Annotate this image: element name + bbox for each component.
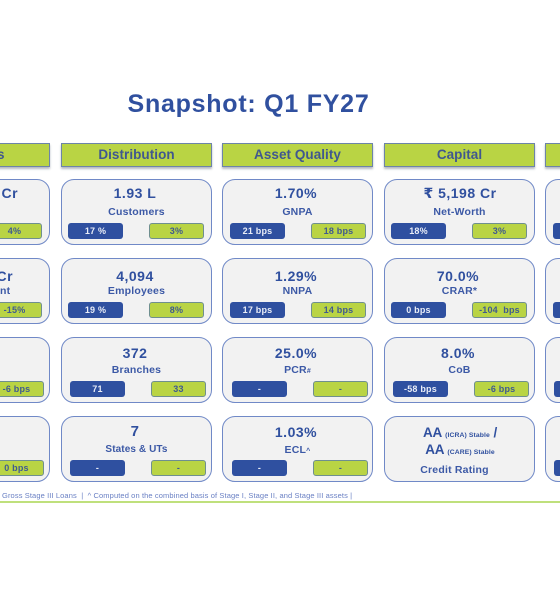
header: capital xyxy=(384,143,535,167)
green badge: - xyxy=(339,384,342,394)
green badge: 4% xyxy=(8,226,21,236)
green badge xyxy=(0,223,42,239)
green badge: 3% xyxy=(170,226,183,236)
green badge xyxy=(149,223,204,239)
panel: states and UTs xyxy=(61,416,212,482)
panel: net-worth xyxy=(384,179,535,245)
green badge: 18 bps xyxy=(324,226,353,236)
blue badge: -58 bps xyxy=(404,384,437,394)
green badge xyxy=(472,302,527,318)
blue badge: 71 xyxy=(92,384,103,394)
panel: first column row 2 (cropped) xyxy=(0,258,50,324)
green badge xyxy=(151,381,206,397)
panel: NNPA xyxy=(222,258,373,324)
green badge xyxy=(472,223,527,239)
blue badge: - xyxy=(258,463,261,473)
panel: last column row 1 (cropped) xyxy=(545,179,560,245)
blue badge xyxy=(70,381,125,397)
panel: employees xyxy=(61,258,212,324)
green badge: -6 bps xyxy=(488,384,515,394)
label: nt xyxy=(0,285,10,297)
blue badge: 17 % xyxy=(85,226,106,236)
header: first column (cropped) xyxy=(0,143,50,167)
blue badge xyxy=(393,381,448,397)
panel: first column row 4 (cropped) xyxy=(0,416,50,482)
label: PCR# xyxy=(284,364,311,376)
blue badge xyxy=(230,223,285,239)
blue badge: 21 bps xyxy=(243,226,272,236)
panel: GNPA xyxy=(222,179,373,245)
label: ECL^ xyxy=(285,444,310,456)
ICRA rating: AA (ICRA) Stable / xyxy=(423,425,497,440)
label: CRAR* xyxy=(442,285,477,297)
footnote: Gross Stage III Loans | ^ Computed on the combined basis of Stage I, Stage II, and Stage III assets | xyxy=(2,491,352,500)
blue badge xyxy=(553,223,560,239)
label: Employees xyxy=(108,285,165,297)
label: Branches xyxy=(112,364,161,376)
label: Net-Worth xyxy=(433,206,486,218)
value: 1.03% xyxy=(275,424,317,440)
panel: cost of borrowing xyxy=(384,337,535,403)
green badge xyxy=(474,381,529,397)
value: 1.93 L xyxy=(114,185,156,201)
panel: last column row 3 (cropped) xyxy=(545,337,560,403)
CARE rating: AA (CARE) Stable xyxy=(425,442,495,457)
blue badge xyxy=(70,460,125,476)
value: ₹ 5,198 Cr xyxy=(423,185,497,201)
green badge xyxy=(313,381,368,397)
green badge: -104 bps xyxy=(479,305,520,315)
blue badge: 0 bps xyxy=(406,305,431,315)
header: asset quality: Asset Quality xyxy=(254,147,341,162)
title: Snapshot: Q1 FY27 xyxy=(128,90,369,118)
blue badge xyxy=(232,460,287,476)
panel: customers xyxy=(61,179,212,245)
blue badge xyxy=(232,381,287,397)
value: 70.0% xyxy=(437,268,479,284)
panel: ECL xyxy=(222,416,373,482)
green badge: -6 bps xyxy=(3,384,30,394)
value: Cr xyxy=(2,185,18,201)
green badge: -15% xyxy=(4,305,25,315)
label: Credit Rating xyxy=(420,464,489,476)
label: NNPA xyxy=(283,285,312,297)
green badge xyxy=(0,381,44,397)
blue badge xyxy=(68,302,123,318)
blue badge: - xyxy=(96,463,99,473)
value: 7 xyxy=(131,423,139,440)
blue badge xyxy=(391,302,446,318)
green badge: 8% xyxy=(170,305,183,315)
green badge: 33 xyxy=(173,384,184,394)
panel: first column row 1 (cropped) xyxy=(0,179,50,245)
value: 372 xyxy=(123,345,147,361)
panel: last column row 2 (cropped) xyxy=(545,258,560,324)
label: CoB xyxy=(448,364,471,376)
value: 25.0% xyxy=(275,345,317,361)
header: last column (cropped) xyxy=(545,143,560,167)
blue badge xyxy=(554,460,560,476)
value: 8.0% xyxy=(441,345,475,361)
blue badge: - xyxy=(258,384,261,394)
blue badge xyxy=(553,302,560,318)
panel: last column row 4 (cropped) xyxy=(545,416,560,482)
value: 1.70% xyxy=(275,185,317,201)
green badge xyxy=(311,302,366,318)
green badge xyxy=(0,460,44,476)
header: asset quality xyxy=(222,143,373,167)
green badge xyxy=(313,460,368,476)
header: distribution xyxy=(61,143,212,167)
green badge xyxy=(151,460,206,476)
value: 1.29% xyxy=(275,268,317,284)
header: distribution: Distribution xyxy=(98,147,175,162)
green badge xyxy=(311,223,366,239)
blue badge xyxy=(68,223,123,239)
panel: credit rating xyxy=(384,416,535,482)
blue badge xyxy=(554,381,560,397)
panel: CRAR xyxy=(384,258,535,324)
green badge: - xyxy=(339,463,342,473)
blue badge: 18% xyxy=(409,226,428,236)
panel: PCR xyxy=(222,337,373,403)
label: States & UTs xyxy=(105,444,168,455)
blue badge: 17 bps xyxy=(243,305,272,315)
blue badge: 19 % xyxy=(85,305,106,315)
green badge: 3% xyxy=(493,226,506,236)
green badge xyxy=(149,302,204,318)
footer rule xyxy=(0,501,560,503)
green badge xyxy=(0,302,42,318)
label: Customers xyxy=(108,206,165,218)
blue badge xyxy=(391,223,446,239)
label: GNPA xyxy=(282,206,313,218)
green badge: 0 bps xyxy=(4,463,29,473)
value: 4,094 xyxy=(116,268,154,284)
green badge: 14 bps xyxy=(324,305,353,315)
header: capital: Capital xyxy=(437,147,482,162)
green badge: - xyxy=(177,463,180,473)
panel: branches xyxy=(61,337,212,403)
blue badge xyxy=(230,302,285,318)
panel: first column row 3 (cropped) xyxy=(0,337,50,403)
